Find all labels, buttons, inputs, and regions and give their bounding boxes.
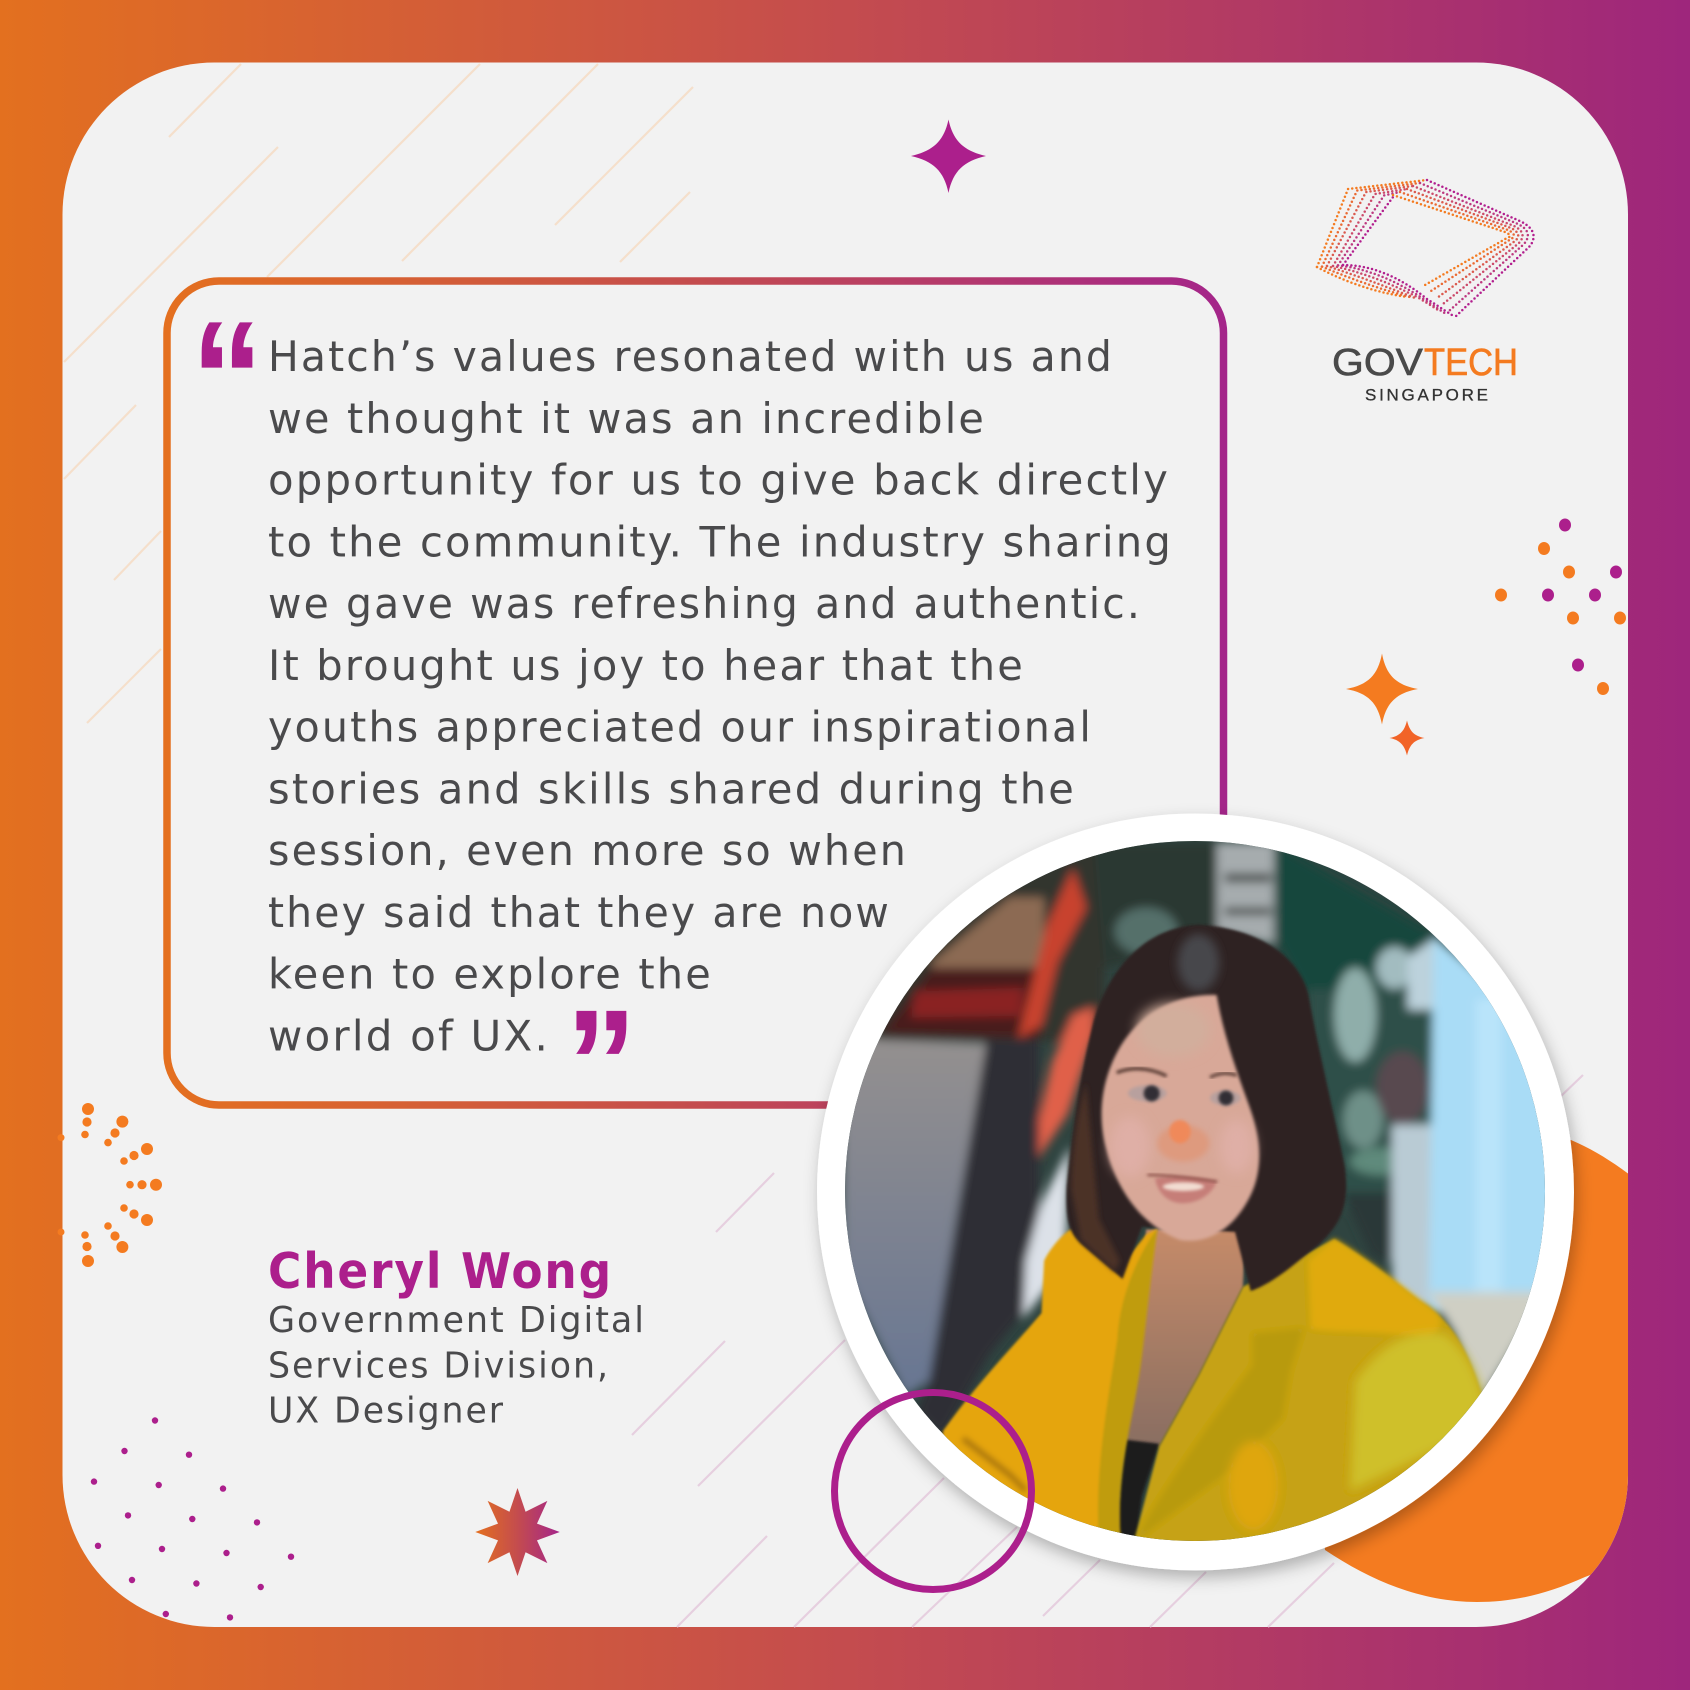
dots burst: left orange — [58, 1103, 162, 1267]
face — [1102, 995, 1259, 1241]
neck — [1123, 1229, 1245, 1446]
logo: GovTech Singapore — [1317, 180, 1534, 404]
black top — [1115, 1440, 1159, 1543]
orange blob: bottom right — [1300, 1140, 1630, 1602]
hair — [1066, 925, 1346, 1291]
role line 2: Services Division, — [268, 1346, 610, 1386]
star: eight-point gradient — [475, 1488, 560, 1576]
star: large orange — [1346, 654, 1418, 724]
logo: GovTech Singapore: SINGAPORE — [1365, 386, 1488, 404]
quote text block: to the community. The industry sharing — [268, 517, 1173, 566]
quote text block — [191, 289, 1173, 1149]
decorative diagonal lines: top left — [64, 64, 693, 723]
dots cluster: right — [1495, 518, 1626, 695]
quote text block: they said that they are now — [268, 888, 891, 937]
quote text block: session, even more so when — [268, 826, 908, 875]
icon: opening quote mark: “ — [191, 289, 263, 467]
photo background — [843, 837, 1575, 1439]
logo: GovTech Singapore: TECH — [1424, 342, 1518, 384]
white ring — [817, 814, 1574, 1570]
icon: closing quote mark: ” — [566, 979, 637, 1149]
quote text block: stories and skills shared during the — [268, 764, 1076, 813]
role line 3: UX Designer — [268, 1390, 505, 1432]
dots field: bottom left purple — [91, 1417, 294, 1621]
quote text block: we thought it was an incredible — [268, 394, 986, 443]
decorative diagonal lines: bottom — [632, 1075, 1583, 1627]
quote text block: we gave was refreshing and authentic. — [268, 579, 1142, 628]
quote text block: youths appreciated our inspirational — [268, 702, 1093, 752]
attribution block — [268, 1243, 646, 1432]
photo: portrait with white ring — [817, 814, 1575, 1570]
name: Cheryl Wong — [268, 1243, 613, 1300]
quote text block: It brought us joy to hear that the — [268, 641, 1025, 690]
quote text block: keen to explore the — [268, 950, 713, 998]
star: purple four-point top — [911, 120, 986, 193]
purple outline circle — [834, 1392, 1032, 1590]
quote text block: opportunity for us to give back directly — [268, 456, 1170, 504]
quote text block: Hatch’s values resonated with us and — [268, 332, 1114, 381]
yellow jacket — [932, 1228, 1483, 1543]
logo wordmark: GOV — [1332, 342, 1424, 384]
portrait illustration — [843, 837, 1575, 1543]
star: small orange — [1390, 720, 1424, 756]
panel: quote box outline — [167, 281, 1224, 1105]
quote text block: world of UX. — [268, 1011, 550, 1060]
logo mark: dotted ribbon — [1317, 180, 1534, 317]
role line 1: Government Digital — [268, 1300, 646, 1341]
